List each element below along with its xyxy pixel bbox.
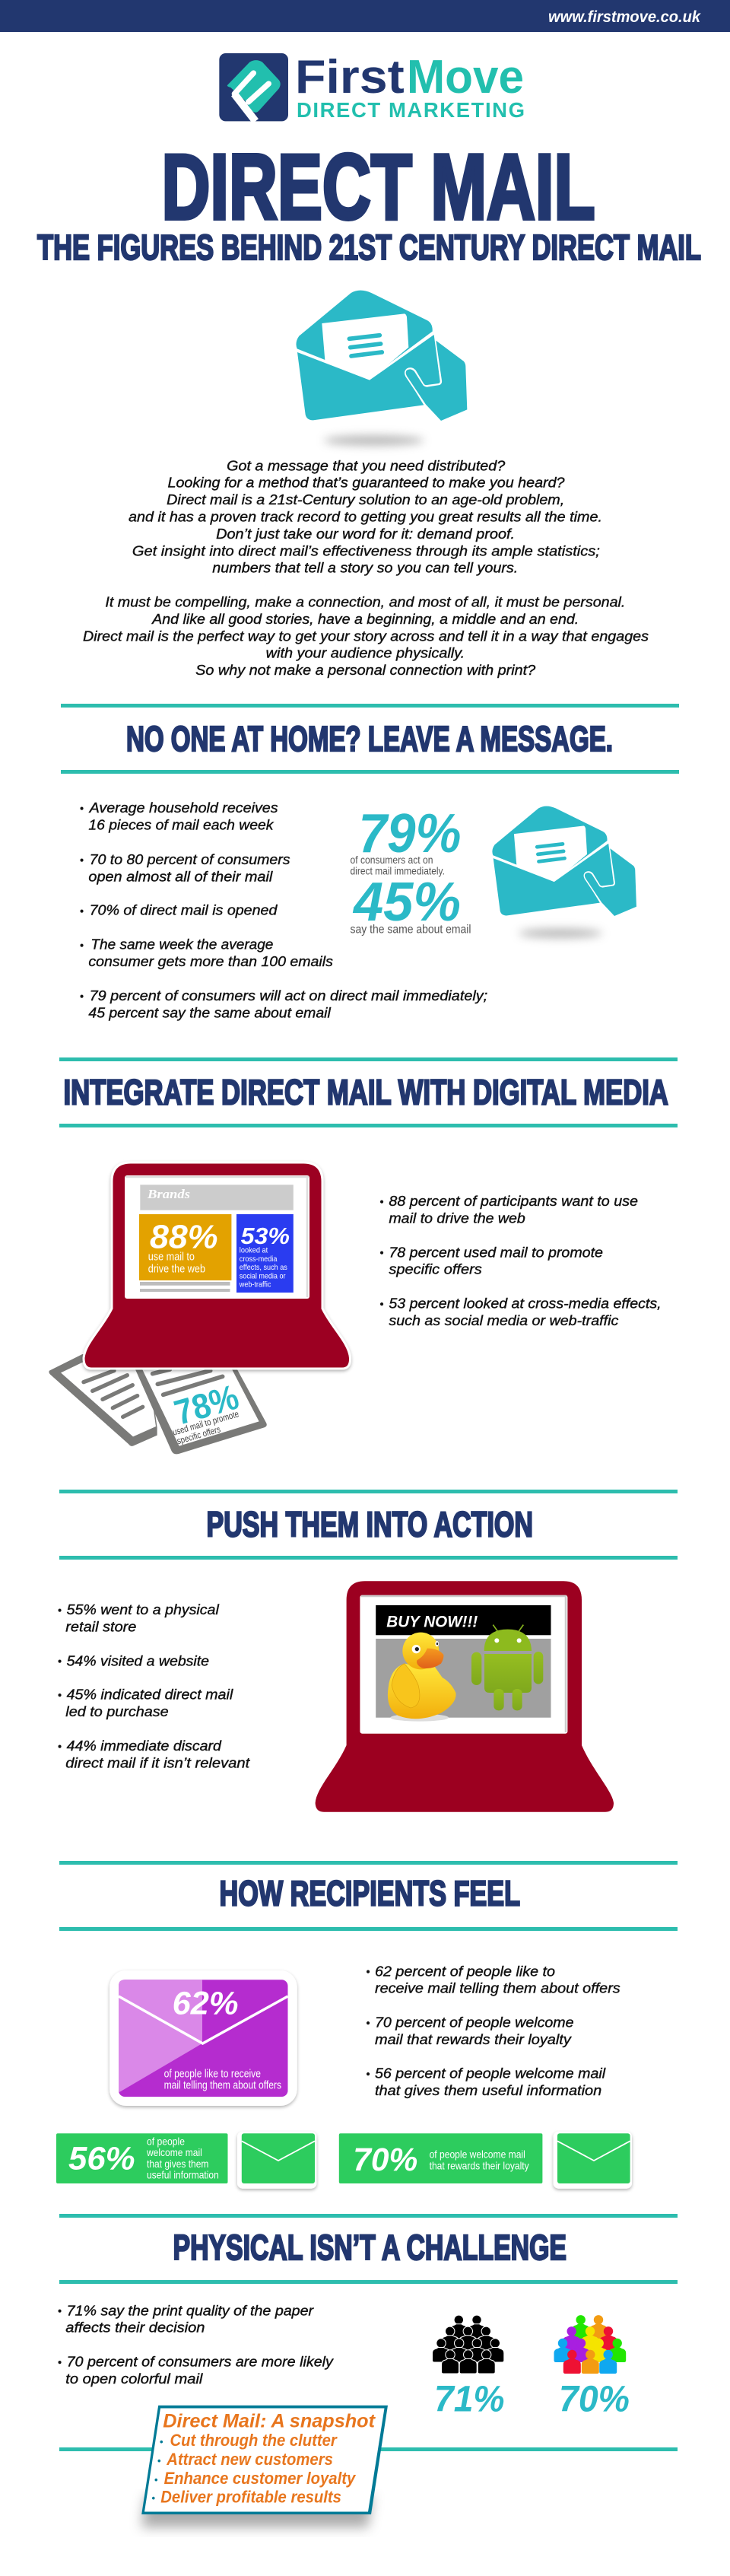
- panel: 56 percent: 56%: [68, 2141, 135, 2177]
- intro text: Looking for a method that’s guaranteed to make you heard?: [167, 475, 565, 491]
- panel: 70 percent: of people welcome mail: [430, 2148, 525, 2161]
- heading: how recipients feel: HOW RECIPIENTS FEEL: [219, 1874, 520, 1913]
- heading: push them into action: PUSH THEM INTO ACTION: [207, 1505, 533, 1544]
- callout: direct mail snapshot: [141, 2406, 388, 2527]
- bullets: push them into action: retail store: [65, 1618, 136, 1634]
- callout list: •: [160, 2436, 163, 2447]
- panel: 56 percent: of people: [147, 2135, 185, 2147]
- intro text: and it has a proven track record to getting you great results all the time.: [129, 508, 602, 525]
- intro text: And like all good stories, have a beginning, a middle and an end.: [151, 611, 579, 627]
- panel: 56 percent: useful information: [147, 2169, 219, 2181]
- bullets: physical: 71% say the print quality of the paper: [67, 2302, 314, 2318]
- screen header: [140, 1185, 294, 1210]
- logo mark: [219, 53, 288, 121]
- logo: DIRECT MARKETING: [297, 98, 525, 122]
- panel: 70 percent: 70%: [353, 2142, 417, 2178]
- bullets: integrate: mail to drive the web: [389, 1210, 525, 1226]
- bullets: how recipients feel: mail that rewards their loyalty: [375, 2031, 573, 2047]
- bullets: push them into action: •: [58, 1689, 62, 1701]
- panel: 53 percent: 53%: [241, 1223, 290, 1249]
- intro text: Direct mail is the perfect way to get your story across and tell it in a way that engages: [83, 628, 649, 644]
- bullets: no one at home: 70% of direct mail is opened: [90, 902, 278, 918]
- intro text: Get insight into direct mail’s effectiveness through its ample statistics;: [132, 542, 600, 558]
- bullets: how recipients feel: •: [367, 2016, 370, 2028]
- bullets: no one at home: 70 to 80 percent of consumers: [90, 851, 290, 867]
- bullets: physical: affects their decision: [65, 2320, 205, 2336]
- icon: green envelope: [554, 2132, 632, 2189]
- bullets: no one at home: 79 percent of consumers will act on direct mail immediately;: [90, 987, 487, 1003]
- bullets: no one at home: Average household receives: [89, 800, 278, 816]
- bullets: integrate: •: [380, 1298, 383, 1310]
- bullets: push them into action: 55% went to a physical: [67, 1601, 220, 1617]
- illustration: purple envelope 62 percent: of people like to receive: [164, 2069, 261, 2081]
- intro text: [83, 457, 649, 678]
- bullets: integrate: [380, 1193, 662, 1328]
- panel: 88 percent: [139, 1214, 231, 1280]
- illustration: purple envelope 62 percent: [110, 1970, 297, 2106]
- illustration: purple envelope 62 percent: mail telling them about offers: [164, 2080, 281, 2092]
- bullets: how recipients feel: •: [367, 1965, 370, 1977]
- screen header: Brands: [147, 1187, 190, 1201]
- intro text: So why not make a personal connection with print?: [195, 662, 536, 678]
- panel: 70 percent: that rewards their loyalty: [430, 2159, 529, 2171]
- icon: rubber duck: [388, 1633, 456, 1722]
- logo: [219, 51, 525, 122]
- callout list: •: [154, 2474, 158, 2485]
- intro text: It must be compelling, make a connection, and most of all, it must be personal.: [105, 593, 625, 610]
- bullets: integrate: 53 percent looked at cross-media effects,: [389, 1296, 662, 1312]
- bullets: physical: to open colorful mail: [65, 2371, 203, 2387]
- callout heading: Direct Mail: A snapshot: [163, 2411, 376, 2432]
- bullets: physical: 70 percent of consumers are more likely: [67, 2354, 335, 2370]
- bullets: no one at home: 16 pieces of mail each week: [88, 817, 275, 833]
- bullets: integrate: specific offers: [389, 1261, 482, 1277]
- bullets: no one at home: open almost all of their mail: [88, 868, 273, 884]
- stat: 71 percent: 71%: [434, 2379, 505, 2419]
- bullets: push them into action: 44% immediate discard: [67, 1738, 222, 1754]
- callout list: •: [157, 2455, 161, 2466]
- illustration: printed pages: used mail to promote: [171, 1408, 240, 1438]
- callout list: •: [152, 2492, 155, 2504]
- bullets: push them into action: •: [58, 1740, 62, 1752]
- panel: 53 percent: web-traffic: [239, 1280, 271, 1289]
- panel: 56 percent: [56, 2133, 228, 2183]
- bullets: how recipients feel: [367, 1963, 620, 2098]
- bullets: integrate: 78 percent used mail to promote: [389, 1244, 603, 1260]
- panel: 53 percent: social media or: [240, 1271, 286, 1280]
- bullets: physical: [58, 2302, 335, 2387]
- bullets: how recipients feel: 70 percent of people welcome: [375, 2015, 573, 2031]
- icon: black crowd: [432, 2315, 504, 2374]
- bullets: integrate: •: [380, 1246, 383, 1258]
- panel: 88 percent: use mail to: [148, 1251, 195, 1264]
- logo: Move: [407, 51, 524, 103]
- panel: 53 percent: [236, 1214, 294, 1293]
- stat: 78 percent: 78%: [170, 1376, 243, 1433]
- panel: 53 percent: effects, such as: [240, 1263, 287, 1272]
- panel: 53 percent: cross-media: [240, 1255, 278, 1264]
- bullets: no one at home: •: [80, 939, 84, 951]
- panel: 56 percent: welcome mail: [146, 2146, 202, 2158]
- intro text: numbers that tell a story so you can tell yours.: [212, 560, 518, 576]
- bullets: push them into action: 45% indicated direct mail: [67, 1687, 233, 1703]
- bullets: how recipients feel: receive mail telling them about offers: [375, 1980, 620, 1996]
- illustration: laptop with buy now: [316, 1581, 614, 1812]
- bullets: no one at home: The same week the average: [90, 937, 273, 952]
- bullets: integrate: •: [380, 1195, 383, 1207]
- bullets: no one at home: 45 percent say the same about email: [88, 1004, 332, 1020]
- panel: 88 percent: drive the web: [148, 1262, 205, 1275]
- stat: 45 percent: say the same about email: [350, 924, 471, 937]
- top bar: [0, 0, 730, 32]
- stat: 79 percent: 79%: [359, 803, 461, 864]
- icon: open envelope with letter: [296, 291, 467, 446]
- illustration: purple envelope 62 percent: 62%: [173, 1986, 239, 2022]
- bullets: physical: •: [58, 2355, 62, 2368]
- panel: 53 percent: looked at: [240, 1246, 268, 1255]
- bullets: integrate: 88 percent of participants want to use: [389, 1193, 638, 1209]
- bullets: no one at home: [80, 800, 487, 1020]
- icon: green envelope: [237, 2132, 316, 2189]
- intro text: Don’t just take our word for it: demand proof.: [216, 526, 515, 542]
- stat: 45 percent: 45%: [352, 872, 461, 933]
- bullets: how recipients feel: 62 percent of people like to: [375, 1963, 555, 1979]
- intro text: Got a message that you need distributed?: [227, 457, 506, 473]
- bullets: no one at home: •: [80, 802, 84, 814]
- bullets: how recipients feel: •: [367, 2068, 370, 2080]
- callout list: Deliver profitable results: [160, 2487, 341, 2506]
- bullets: integrate: such as social media or web-traffic: [389, 1312, 619, 1328]
- icon: colourful crowd: [554, 2315, 626, 2374]
- bullets: push them into action: led to purchase: [65, 1703, 169, 1719]
- bullets: no one at home: •: [80, 905, 84, 917]
- banner: buy now: BUY NOW!!!: [386, 1613, 478, 1630]
- intro text: with your audience physically.: [266, 645, 465, 661]
- illustration: laptop with stats: [84, 1162, 351, 1369]
- bullets: no one at home: •: [80, 990, 84, 1002]
- panel: 56 percent: that gives them: [147, 2158, 208, 2170]
- panel: 70 percent: [339, 2133, 542, 2183]
- bullets: how recipients feel: that gives them useful information: [375, 2082, 601, 2098]
- callout list: Enhance customer loyalty: [164, 2469, 357, 2488]
- bullets: push them into action: direct mail if it isn’t relevant: [65, 1754, 250, 1770]
- panel: 88 percent: 88%: [150, 1219, 218, 1256]
- stat: 70 percent: 70%: [559, 2379, 630, 2419]
- stat: 79 percent: of consumers act on: [350, 854, 433, 866]
- logo wordmark: First: [295, 51, 405, 103]
- heading: physical: PHYSICAL ISN’T A CHALLENGE: [173, 2228, 567, 2267]
- banner: buy now: [376, 1605, 551, 1635]
- illustration: printed pages: specific offers: [176, 1423, 222, 1446]
- icon: envelope: [492, 806, 636, 938]
- callout list: Cut through the clutter: [170, 2431, 338, 2450]
- bullets: how recipients feel: 56 percent of people welcome mail: [375, 2066, 606, 2081]
- icon: android robot: [471, 1625, 543, 1710]
- callout list: [152, 2431, 357, 2506]
- bullets: push them into action: •: [58, 1655, 62, 1667]
- bullets: no one at home: •: [80, 854, 84, 866]
- bullets: push them into action: [58, 1601, 250, 1770]
- intro text: Direct mail is a 21st-Century solution to an age-old problem,: [167, 491, 564, 507]
- bullets: push them into action: 54% visited a website: [67, 1652, 209, 1668]
- bullets: push them into action: •: [58, 1604, 62, 1616]
- website url: www.firstmove.co.uk: [548, 8, 701, 26]
- callout list: Attract new customers: [166, 2450, 333, 2469]
- illustration: printed pages: [49, 1354, 267, 1454]
- bullets: physical: •: [58, 2304, 62, 2317]
- bullets: no one at home: consumer gets more than 100 emails: [88, 953, 333, 969]
- stat: 79 percent: direct mail immediately.: [350, 865, 445, 876]
